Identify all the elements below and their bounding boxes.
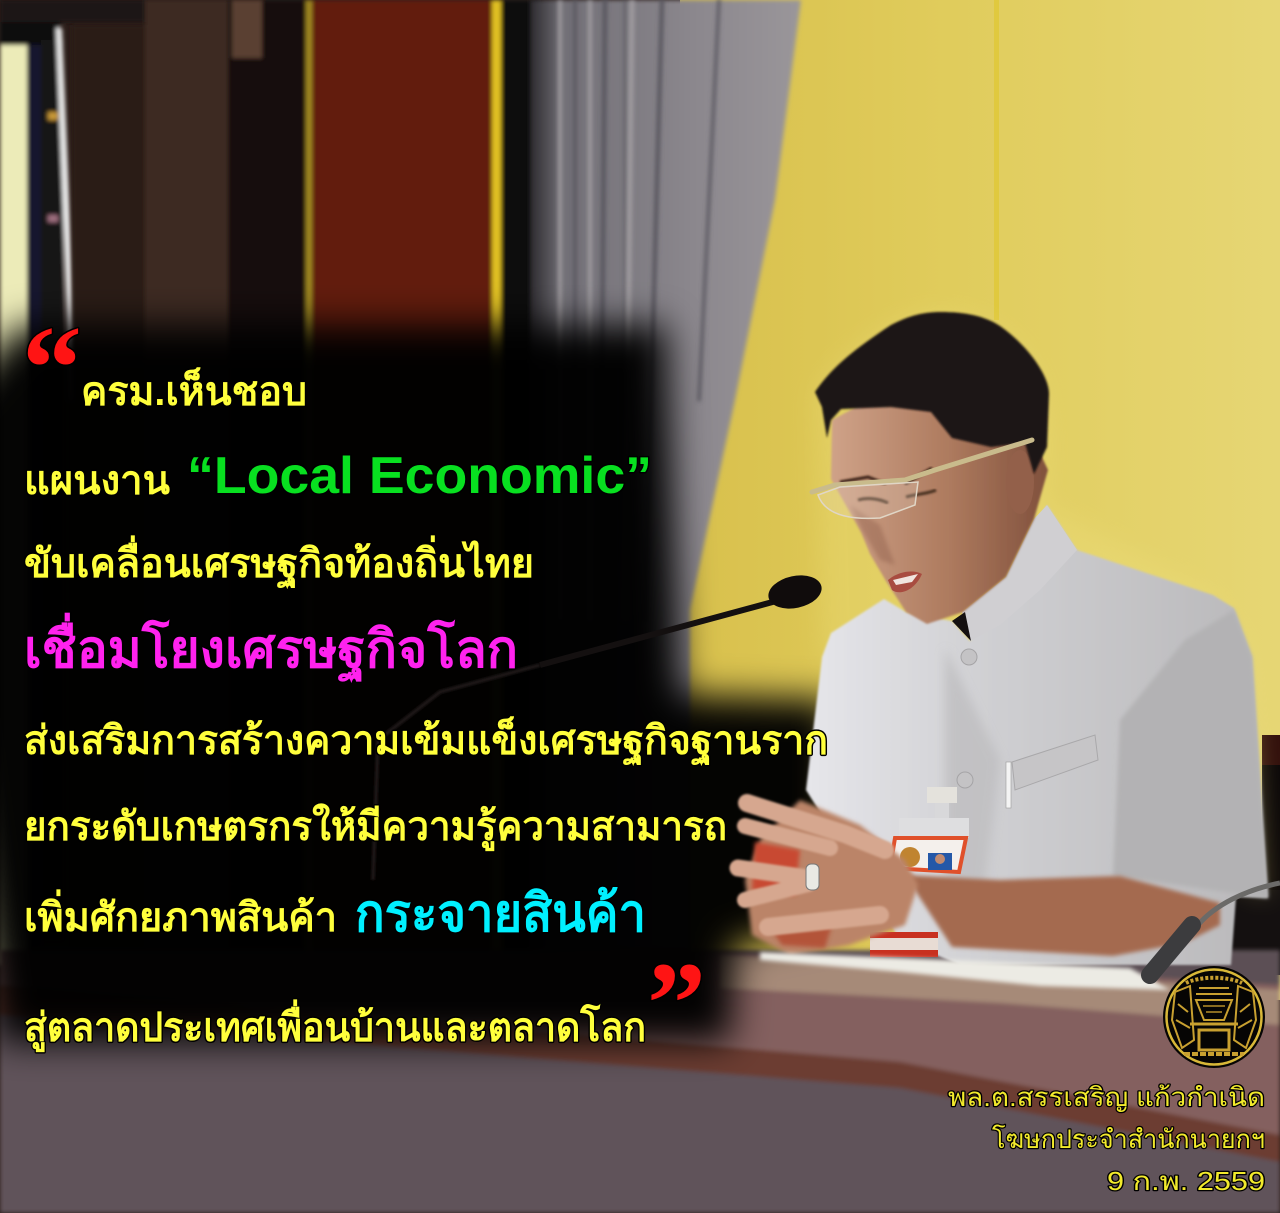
line 2: แผนงาน xyxy=(24,459,170,503)
shirt xyxy=(806,505,1268,965)
forearm xyxy=(905,875,1220,956)
window at left xyxy=(0,0,145,965)
papers xyxy=(760,952,1170,990)
neck and face xyxy=(831,405,1048,624)
icon: government seal xyxy=(1163,966,1265,1068)
date: 9 ก.พ. 2559 xyxy=(1107,1166,1265,1196)
line 6: ยกระดับเกษตรกรให้มีความรู้ความสามารถ xyxy=(24,803,727,851)
hand xyxy=(738,800,918,955)
line 7 xyxy=(24,885,646,943)
buttons xyxy=(957,649,977,788)
curtain xyxy=(530,0,801,1000)
speaker portrait xyxy=(373,312,1268,965)
hair xyxy=(815,312,1049,474)
eyebrows and eyes xyxy=(840,468,932,484)
spokesperson name: พล.ต.สรรเสริญ แก้วกำเนิด xyxy=(948,1082,1265,1112)
right microphone xyxy=(1198,883,1280,925)
mouth xyxy=(888,572,922,592)
quotation block xyxy=(22,301,828,1069)
line 8: สู่ตลาดประเทศเพื่อนบ้านและตลาดโลก xyxy=(24,999,646,1052)
wood panels and red column xyxy=(72,0,541,1025)
desk xyxy=(0,950,1280,1213)
spokesperson title: โฆษกประจำสำนักนายกฯ xyxy=(992,1124,1265,1154)
ear xyxy=(1006,450,1034,514)
yellow wall xyxy=(680,0,1280,1000)
dark gradient text backdrop xyxy=(0,325,835,1042)
dark chair at right xyxy=(1225,735,1280,975)
line 2: “Local Economic” xyxy=(187,447,652,505)
id badge xyxy=(870,787,969,957)
closing quote mark: ” xyxy=(647,938,706,1069)
line 5: ส่งเสริมการสร้างความเข้มแข็งเศรษฐกิจฐานราก xyxy=(24,715,828,767)
microphone xyxy=(373,571,825,880)
pocket and pen xyxy=(1006,735,1098,808)
line 7: กระจายสินค้า xyxy=(355,885,646,943)
opening quote mark: “ xyxy=(22,301,82,434)
line 7: เพิ่มศักยภาพสินค้า xyxy=(24,889,337,940)
desk papers and right microphone xyxy=(760,883,1280,990)
bright halo around speaker xyxy=(815,312,1268,898)
face shading xyxy=(850,505,895,565)
glasses xyxy=(812,440,1032,518)
collar xyxy=(962,505,1077,641)
line 1: ครม.เห็นชอบ xyxy=(81,366,307,414)
line 3: ขับเคลื่อนเศรษฐกิจท้องถิ่นไทย xyxy=(24,535,534,590)
signature block xyxy=(948,1082,1265,1196)
line 4: เชื่อมโยงเศรษฐกิจโลก xyxy=(24,613,518,683)
